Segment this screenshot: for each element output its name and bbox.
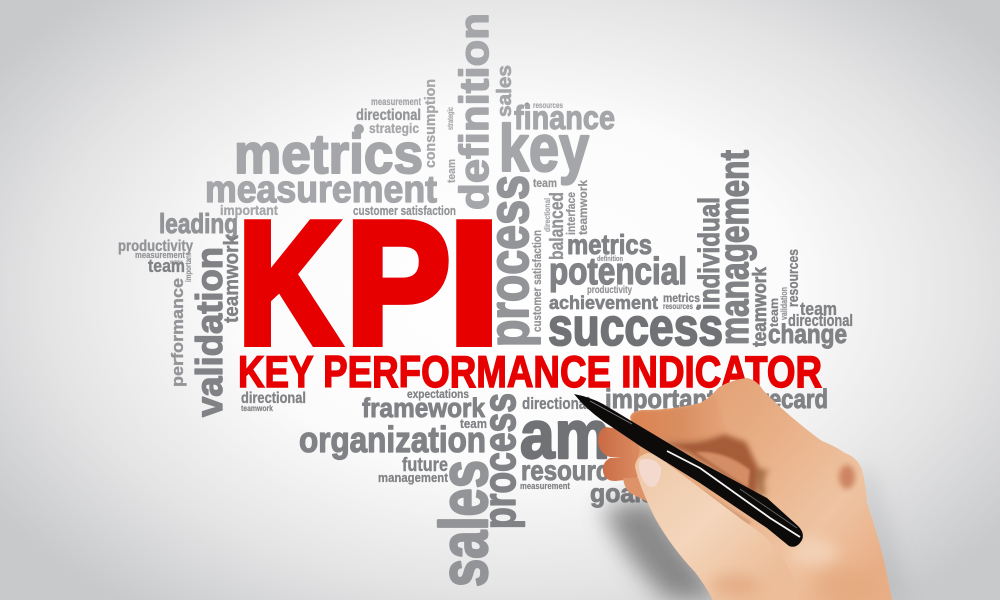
word: process vertical large: process [477,175,541,347]
word: success: success [548,298,723,357]
index finger [630,399,720,441]
word: key: key [499,111,589,185]
word: teamwork vertical: teamwork [576,180,590,235]
word: potencial: potencial [549,251,687,293]
word: metrics mid: metrics [567,229,652,260]
word: framework: framework [362,393,486,423]
word: team vertical right: team [767,298,781,327]
word: process vertical bottom: process [474,393,525,529]
word: team right: team [800,299,837,319]
word: measurement top: measurement [371,97,422,108]
word: definition vertical: definition [451,13,497,210]
highlight near pen end [791,538,839,566]
word: directional bottom left: directional [241,390,306,407]
word: sales vertical bottom: sales [426,460,502,587]
word: management vertical: management [711,150,757,345]
bottom right tint [819,572,853,594]
word: team left: team [148,256,185,276]
word: validation vertical: validation [189,247,230,417]
word: strategic vertical tiny: strategic [446,107,455,130]
word: team near key: team [533,176,557,190]
word: resources vertical: resources [785,249,802,307]
word: important vertical tiny: important [184,253,193,282]
word: teamwork vertical right: teamwork [750,267,771,347]
pen highlight edge [740,489,797,528]
letter P: P [346,186,450,381]
word: future: future [402,455,448,476]
thumb [635,453,800,600]
word: consumption vertical: consumption [423,79,439,168]
word: organization: organization [299,419,486,460]
word: directional top: directional [356,107,421,124]
pen highlight main [667,451,800,537]
pen body [574,394,803,547]
subtitle: key performance indicator: KEY PERFORMANCE INDICATOR [238,348,822,397]
word: productivity small: productivity [587,285,632,296]
word: balanced vertical: balanced [547,192,568,260]
word: validation vertical tiny: validation [779,287,789,320]
word: metrics tiny left: metrics [170,260,183,266]
word cloud [118,13,853,587]
letter I: I [448,186,500,380]
word: directional vertical tiny: directional [543,198,552,232]
word: important under hand: important [605,384,715,414]
word: strategic: strategic [369,120,419,136]
icon: dot top [354,124,364,134]
word: measurement bottom: measurement [520,481,570,491]
middle finger highlight behind pen [695,452,750,488]
middle finger [598,427,655,458]
word: resources bottom: resources [521,455,636,486]
right-side shadow [855,470,905,600]
title: KPI [238,186,500,381]
word: sales vertical top: sales [494,65,516,117]
word: scorecard under hand: scorecard [722,384,828,414]
word: performance vertical: performance [168,278,187,387]
hand shadow [602,498,722,600]
word: finance: finance [514,99,615,136]
hand body [630,378,892,600]
word: am: am [520,397,610,473]
icon: dot resources [524,102,530,108]
letter K: K [238,186,340,380]
word: directional under pen: directional [522,394,590,413]
palm between pen and thumb [706,492,752,524]
word: team vertical top: team [446,159,458,183]
thumb nail [639,459,661,487]
word: measurement left: measurement [135,250,185,260]
word: leading: leading [159,208,238,239]
word: individual vertical: individual [693,197,726,310]
word: definition tiny: definition [597,256,623,263]
word: productivity left: productivity [118,238,193,255]
word: teamwork vertical left: teamwork [221,234,243,323]
word: expectations: expectations [407,387,469,401]
word: resources tiny: resources [663,301,693,311]
word: goals: goals [590,478,655,508]
word: metrics large: metrics [234,122,423,185]
little finger [623,478,660,502]
word: interface vertical: interface [564,192,578,235]
pen highlight tip [590,401,632,424]
word: change: change [768,319,847,349]
hand shading clipped to silhouette [630,399,858,594]
dark fold under index finger [652,434,760,498]
word: resources small: resources [533,101,563,110]
ring finger [603,456,650,481]
word: customer satisfaction: customer satisfaction [353,203,456,218]
word: measurement large: measurement [205,169,437,211]
knuckle redness [839,465,855,489]
lower thumb tint [711,575,759,595]
word: important: important [220,202,278,218]
word: directional right: directional [788,311,853,330]
word: achievement: achievement [549,293,658,313]
word: management small: management [378,470,449,485]
word: metrics small: metrics [663,291,700,305]
icon: hand holding pen [574,378,905,600]
word: team bottom: team [460,416,487,431]
back of hand fold [756,468,769,498]
word: customer satisfaction vertical: customer satisfaction [530,230,544,332]
word: teamwork bottom left: teamwork [241,404,273,413]
icon: dot metrics [696,306,700,310]
